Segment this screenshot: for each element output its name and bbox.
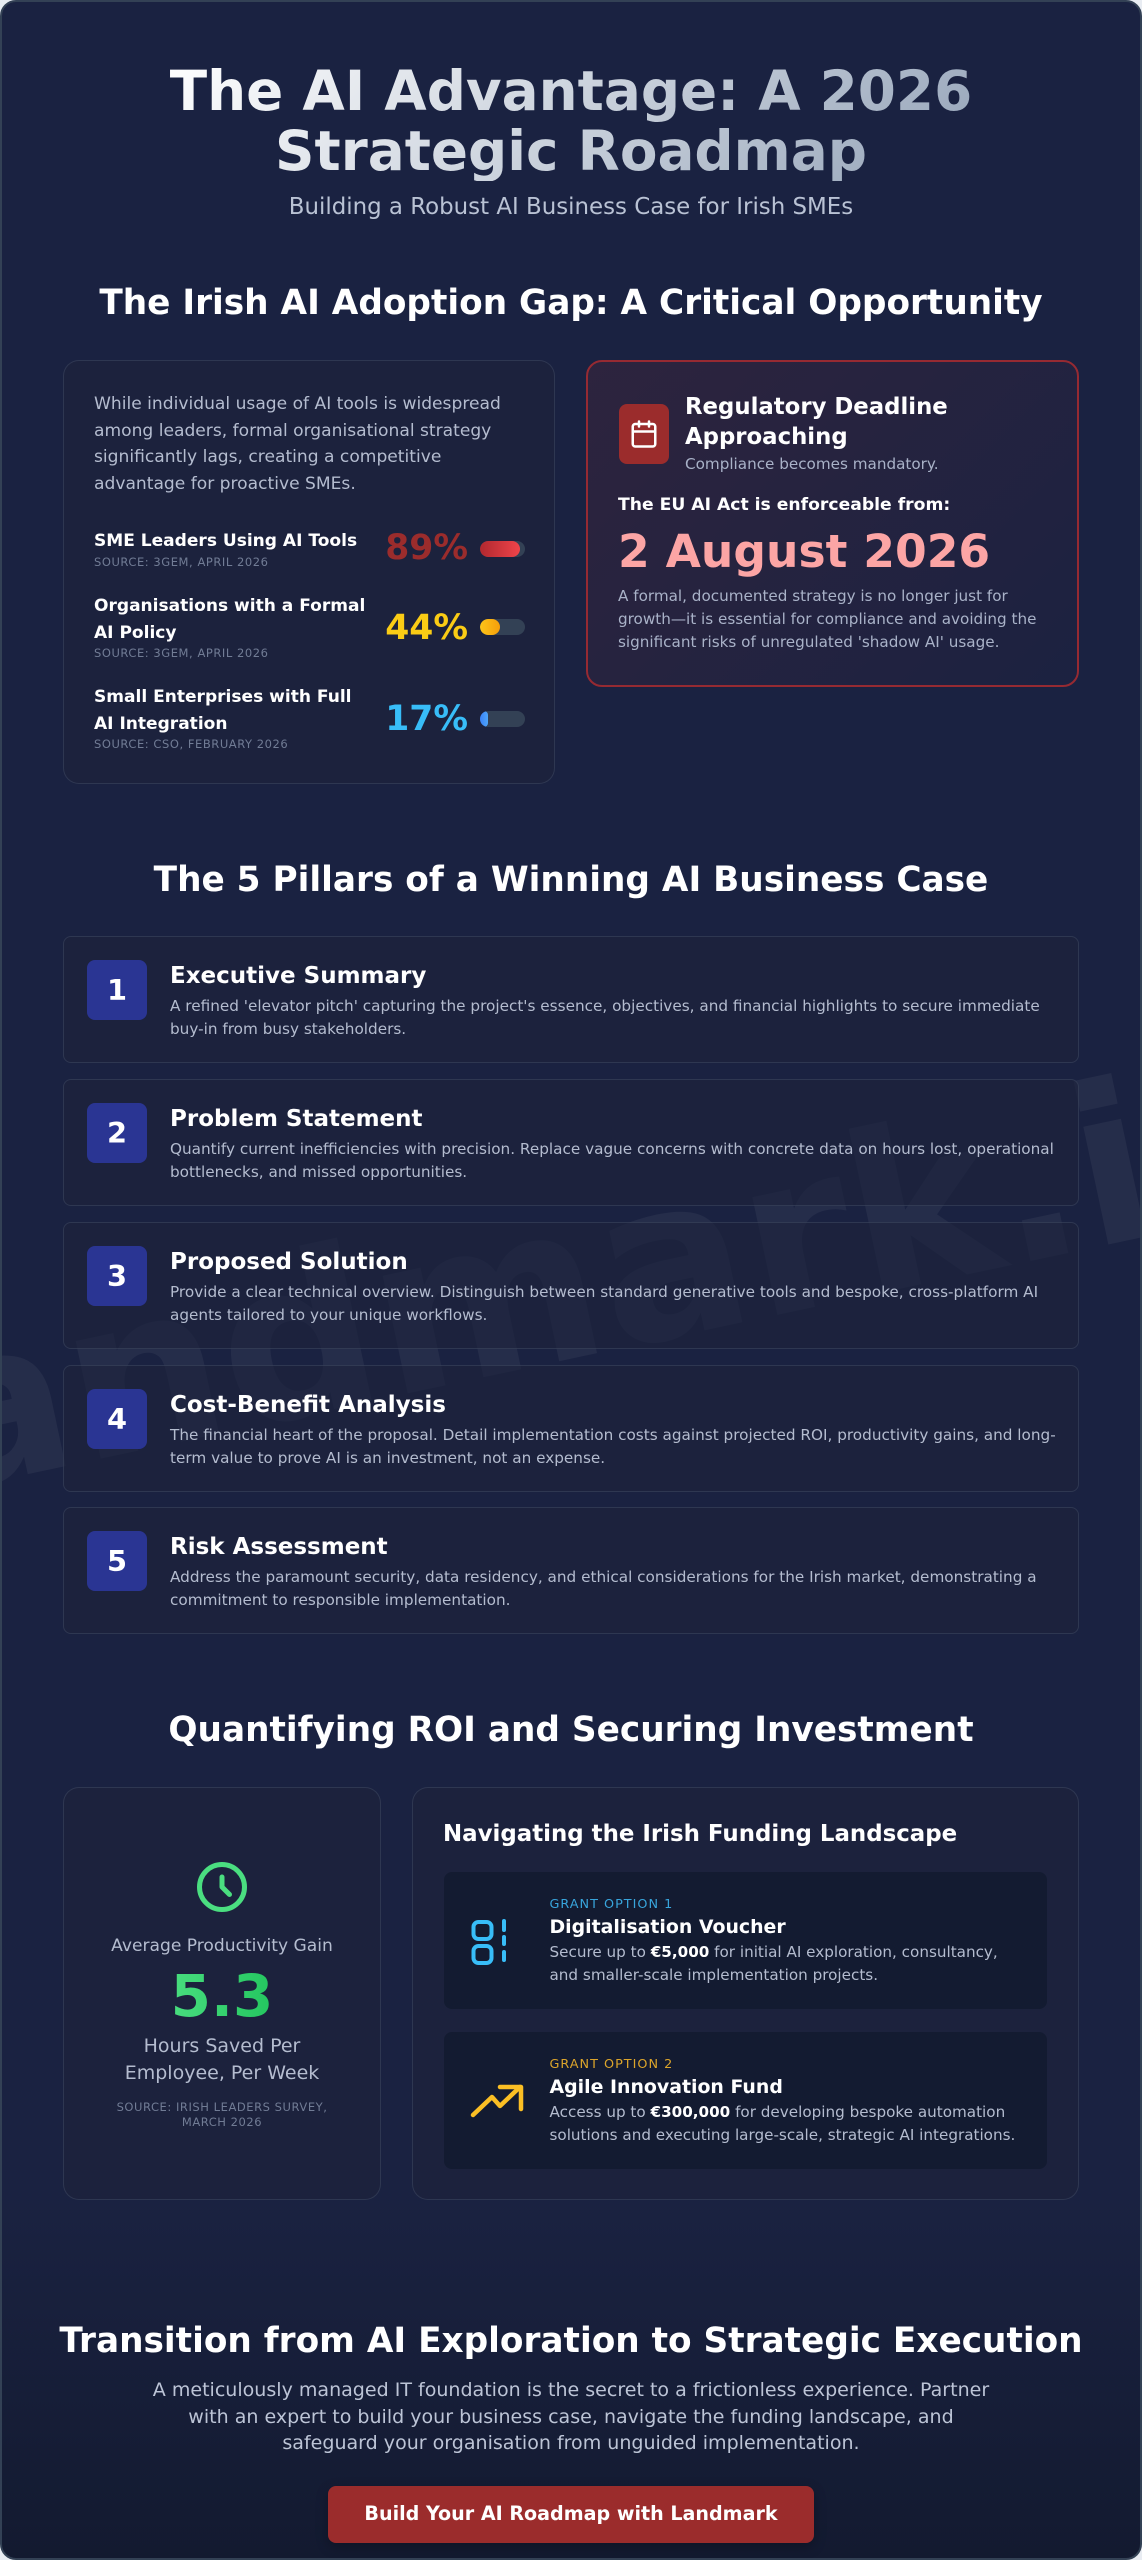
number badge 5	[87, 1531, 147, 1591]
intro text	[94, 394, 501, 494]
grant 2 description: solutions and executing large-scale, strategic AI integrations.	[550, 2126, 1015, 2144]
deadline description: A formal, documented strategy is no longer just for	[618, 587, 1008, 605]
stat value: 44%: 44%	[385, 608, 468, 648]
title	[160, 61, 982, 181]
deadline description: significant risks of unregulated 'shadow AI' usage.	[618, 633, 999, 651]
call to action text: A meticulously managed IT foundation is the secret to a frictionless experience. Partner	[153, 2379, 989, 2401]
intro text: significantly lags, creating a competitive	[94, 447, 441, 467]
number badge 3	[87, 1246, 147, 1306]
stat label: formal policy: Organisations with a Formal	[94, 596, 365, 616]
stat source: SME leaders: SOURCE: 3GEM, APRIL 2026	[94, 555, 268, 569]
pillar 1 title: Executive Summary	[170, 963, 426, 989]
pillar 3 description: agents tailored to your unique workflows.	[170, 1306, 487, 1324]
productivity source	[117, 2100, 327, 2129]
grant 1 kicker: GRANT OPTION 1	[550, 1897, 673, 1912]
panel: funding landscape	[412, 1787, 1079, 2200]
productivity unit: Hours Saved Per	[144, 2035, 300, 2057]
number badge 1: 1	[107, 973, 127, 1007]
grant 2 description: Access up to €300,000 for developing bespoke automation	[550, 2103, 1005, 2121]
icon: trending up arrow	[470, 2084, 524, 2118]
productivity label: Average Productivity Gain	[111, 1936, 333, 1956]
stat source: full integration: SOURCE: CSO, FEBRUARY 2026	[94, 737, 288, 751]
intro text: advantage for proactive SMEs.	[94, 474, 356, 494]
pillar 3: proposed solution	[63, 1222, 1079, 1349]
stat label: full integration	[94, 687, 352, 734]
pillar 4 description: The financial heart of the proposal. Detail implementation costs against projected ROI, productivity gains, and long-	[170, 1426, 1056, 1444]
grant 1 description: Secure up to €5,000 for initial AI exploration, consultancy,	[550, 1943, 998, 1961]
pillar 1 description	[170, 997, 1040, 1038]
deadline heading: Approaching	[685, 424, 848, 450]
number badge 4: 4	[107, 1402, 127, 1436]
number badge 1	[87, 960, 147, 1020]
heading: call to action: Transition from AI Exploration to Strategic Execution	[59, 2321, 1083, 2361]
pillar 2: problem statement	[63, 1079, 1079, 1206]
productivity value: 5.3	[171, 1962, 273, 2030]
subtitle: Building a Robust AI Business Case for Irish SMEs	[289, 194, 853, 220]
pillar 5 description: Address the paramount security, data residency, and ethical considerations for the Irish market, demonstrating a	[170, 1568, 1037, 1586]
stat label: full integration: AI Integration	[94, 714, 228, 734]
deadline heading: Regulatory Deadline	[685, 394, 948, 420]
pillar 2 description: Quantify current inefficiencies with precision. Replace vague concerns with concrete data on hours lost, operational	[170, 1140, 1054, 1158]
icon: clock	[197, 1862, 247, 1912]
call to action text: with an expert to build your business case, navigate the funding landscape, and	[188, 2406, 954, 2428]
pillar 5 title: Risk Assessment	[170, 1534, 388, 1560]
stat label: formal policy	[94, 596, 365, 643]
call to action button: Build Your AI Roadmap with Landmark	[364, 2502, 778, 2525]
number badge 2: 2	[107, 1116, 127, 1150]
icon: calendar	[619, 404, 669, 464]
grant card 2: agile innovation fund	[444, 2032, 1047, 2169]
icon: digital blocks	[472, 1919, 506, 1965]
productivity unit: Employee, Per Week	[125, 2062, 319, 2084]
pillar 4 description	[170, 1426, 1056, 1467]
pillar 2 title: Problem Statement	[170, 1106, 423, 1132]
grant 2 description	[550, 2103, 1015, 2144]
call to action button	[328, 2486, 814, 2543]
pillar 3 description	[170, 1283, 1038, 1324]
pillar 5 description: commitment to responsible implementation.	[170, 1591, 510, 1609]
pillar 1 description: buy-in from busy stakeholders.	[170, 1020, 406, 1038]
pillar 5 description	[170, 1568, 1037, 1609]
pillar 1 description: A refined 'elevator pitch' capturing the project's essence, objectives, and financial highlights to secure immediate	[170, 997, 1040, 1015]
stat value: 17%: 17%	[385, 699, 468, 739]
pillar 2 description: bottlenecks, and missed opportunities.	[170, 1163, 467, 1181]
stat label: formal policy: AI Policy	[94, 623, 177, 643]
title: The AI Advantage: A 2026	[170, 59, 972, 123]
pillar 4: cost-benefit analysis	[63, 1365, 1079, 1492]
pillar 3 title: Proposed Solution	[170, 1249, 408, 1275]
productivity unit	[125, 2035, 320, 2084]
grant 1 description	[550, 1943, 998, 1984]
stat label: SME leaders: SME Leaders Using AI Tools	[94, 531, 357, 551]
number badge 5: 5	[107, 1544, 127, 1578]
call to action text: safeguard your organisation from unguided implementation.	[282, 2432, 860, 2454]
pillar 1: executive summary	[63, 936, 1079, 1063]
pillar 2 description	[170, 1140, 1054, 1181]
stat label: full integration: Small Enterprises with Full	[94, 687, 352, 707]
panel: regulatory deadline	[586, 360, 1079, 687]
number badge 4	[87, 1389, 147, 1449]
enforcement lead-in: The EU AI Act is enforceable from:	[618, 495, 950, 515]
call to action text	[152, 2379, 990, 2454]
number badge 3: 3	[107, 1259, 127, 1293]
grant 2 title: Agile Innovation Fund	[550, 2076, 783, 2098]
grant 2 kicker: GRANT OPTION 2	[550, 2057, 673, 2072]
grant 1 title: Digitalisation Voucher	[550, 1916, 786, 1938]
grant card 1: digitalisation voucher	[444, 1872, 1047, 2009]
pillar 4 title: Cost-Benefit Analysis	[170, 1392, 446, 1418]
grant 1 description: and smaller-scale implementation projects.	[550, 1966, 878, 1984]
deadline description: growth—it is essential for compliance and avoiding the	[618, 610, 1036, 628]
pillar 5: risk assessment	[63, 1507, 1079, 1634]
heading: ROI and investment: Quantifying ROI and Securing Investment	[168, 1710, 974, 1750]
deadline heading	[685, 394, 948, 450]
deadline description	[618, 587, 1036, 651]
productivity source: SOURCE: IRISH LEADERS SURVEY,	[117, 2100, 327, 2114]
stat source: formal policy: SOURCE: 3GEM, APRIL 2026	[94, 646, 268, 660]
title: Strategic Roadmap	[275, 119, 867, 183]
funding heading: Navigating the Irish Funding Landscape	[443, 1821, 957, 1847]
panel: productivity gain	[63, 1787, 381, 2200]
heading: adoption gap: The Irish AI Adoption Gap: A Critical Opportunity	[99, 283, 1043, 323]
stat value: 89%: 89%	[385, 528, 468, 568]
progress bar: 44%	[480, 619, 524, 634]
number badge 2	[87, 1103, 147, 1163]
deadline date: 2 August 2026	[618, 525, 990, 578]
progress bar: 89%	[480, 541, 524, 556]
pillar 3 description: Provide a clear technical overview. Distinguish between standard generative tools and bespoke, cross-platform AI	[170, 1283, 1038, 1301]
intro text: among leaders, formal organisational strategy	[94, 421, 491, 441]
panel: adoption statistics	[63, 360, 555, 784]
deadline subheading: Compliance becomes mandatory.	[685, 455, 939, 473]
progress bar: 17%	[480, 711, 524, 726]
pillar 4 description: term value to prove AI is an investment, not an expense.	[170, 1449, 605, 1467]
intro text: While individual usage of AI tools is widespread	[94, 394, 501, 414]
heading: five pillars: The 5 Pillars of a Winning AI Business Case	[154, 860, 988, 900]
productivity source: MARCH 2026	[182, 2115, 262, 2129]
